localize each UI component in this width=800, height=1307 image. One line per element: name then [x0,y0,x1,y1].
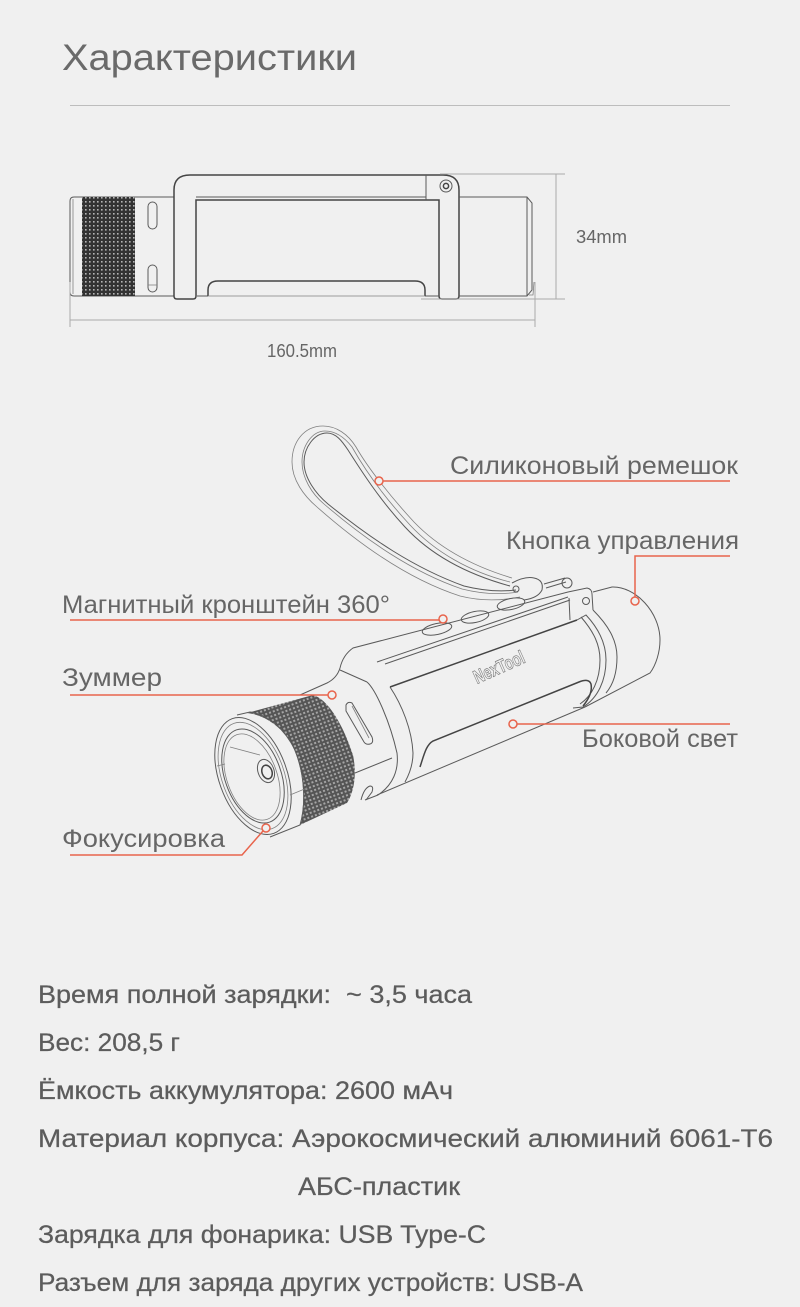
bottom body line [377,707,585,795]
spec: battery: Ёмкость аккумулятора: 2600 мАч [38,1077,453,1105]
control buttons [421,596,526,637]
front slot [346,702,392,800]
body top rails [300,588,593,695]
callout: side light: Боковой свет [582,725,739,753]
perspective drawing of flashlight [200,426,660,845]
wrist strap [292,426,520,600]
flashlight body side view [70,175,534,299]
side view drawing of flashlight with dimensions [70,174,627,361]
callout: strap [375,452,739,485]
screw on bracket [582,598,590,604]
callout: side light [509,720,739,753]
spec: charging port: Зарядка для фонарика: USB Type-C [38,1221,486,1249]
tail cap [459,197,532,296]
spec: output port: Разъем для заряда других устройств: USB-A [38,1269,583,1297]
spec: charge time: Время полной зарядки: ~ 3,5 часа [38,981,472,1009]
knurled focus ring [82,197,135,296]
tail cap [585,587,660,707]
callout: control button: Кнопка управления [506,527,739,555]
callout: magnetic bracket: Магнитный кронштейн 360° [62,591,390,619]
spec: material: Материал корпуса: Аэрокосмический алюминий 6061-T6 [38,1125,773,1153]
dimension length: 160.5mm [267,341,337,361]
callout: focus [62,824,270,855]
specifications list [38,981,773,1297]
bracket [174,175,459,299]
callout: buzzer: Зуммер [62,664,162,692]
title: Характеристики [62,37,357,78]
dimension height: 34mm [576,227,627,247]
front bezel and lens [200,707,307,845]
side light bar [420,680,591,767]
LED [254,757,278,785]
logo: NexTool [470,647,528,689]
knurled ring [247,695,355,825]
callout: control button [506,527,739,605]
window left and bracket curve [365,598,606,800]
dimension length [70,282,535,361]
spec: material line 2: АБС-пластик [298,1173,461,1201]
strap clip [512,578,572,600]
spec: weight: Вес: 208,5 г [38,1029,180,1057]
callout: strap: Силиконовый ремешок [450,452,739,480]
screw [440,180,452,192]
callout: focus: Фокусировка [62,825,225,853]
dimension height [421,174,627,299]
slots [148,202,157,292]
window top edge [390,620,577,687]
callout: buzzer [62,664,336,699]
